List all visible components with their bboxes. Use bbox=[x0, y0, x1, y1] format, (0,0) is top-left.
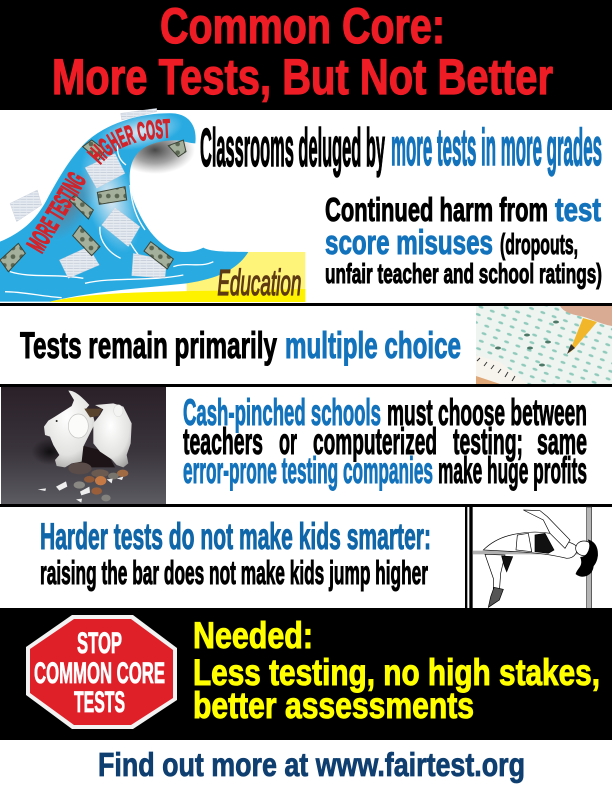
needed text: Needed: bbox=[193, 615, 313, 656]
pig eye bbox=[56, 420, 58, 422]
divider bbox=[0, 384, 612, 387]
panel: call to action band bbox=[0, 608, 612, 740]
shorts edge bbox=[516, 533, 532, 552]
wave highlight mid bbox=[69, 137, 151, 260]
pig ear bbox=[114, 405, 123, 417]
text block: cash-pinched schools: computerized bbox=[313, 421, 437, 462]
pig left half bbox=[44, 391, 95, 467]
text block: cash-pinched schools: Cash-pinched schools bbox=[183, 392, 381, 433]
text block: harder tests bbox=[40, 516, 431, 591]
text block: cash-pinched schools bbox=[183, 392, 587, 491]
pig right half bbox=[93, 403, 132, 467]
wave shape bbox=[0, 113, 248, 302]
panel: title banner bbox=[0, 0, 612, 110]
icon: stop sign: TESTS bbox=[74, 686, 125, 719]
text block: test score misuses bbox=[325, 191, 602, 289]
top bbox=[535, 533, 554, 553]
dark crack interior bbox=[72, 445, 115, 467]
shoe bbox=[488, 587, 503, 607]
torso bbox=[483, 532, 577, 558]
image: answer sheet with pencil bbox=[476, 306, 612, 384]
icon: stop sign bbox=[26, 615, 177, 729]
hair bbox=[576, 540, 598, 576]
pig snout bbox=[68, 414, 88, 438]
image: broken piggy bank bbox=[1, 387, 166, 504]
icon: stop sign: STOP bbox=[77, 627, 122, 660]
text block: cash-pinched schools: or bbox=[279, 421, 297, 462]
panel: wave illustration: MORE TESTING bbox=[21, 167, 92, 257]
dark leg shadow bbox=[502, 556, 513, 572]
needed text bbox=[193, 615, 600, 726]
wave label: higher cost: HIGHER COST bbox=[86, 118, 170, 165]
divider bbox=[0, 303, 612, 306]
crossbar bbox=[473, 551, 587, 554]
coin hole bbox=[84, 409, 102, 417]
text block: cash-pinched schools: testing; bbox=[453, 421, 523, 462]
pig cast shadow bbox=[32, 438, 68, 465]
footer link text: Find out more at www.fairtest.org bbox=[98, 746, 525, 783]
needed text: better assessments bbox=[193, 685, 474, 726]
test papers bbox=[10, 108, 167, 278]
text block: test score misuses: test bbox=[555, 191, 601, 228]
image: high jumper bbox=[465, 507, 598, 608]
wave grey shading bbox=[33, 160, 107, 250]
wave curl shadow bbox=[115, 126, 195, 174]
text block: multiple choice: multiple choice bbox=[285, 325, 461, 366]
coins bbox=[68, 462, 128, 501]
text block: test score misuses: score misuses bbox=[325, 224, 493, 262]
panel: wave illustration bbox=[0, 108, 306, 303]
sand bbox=[50, 252, 305, 302]
athlete bbox=[483, 510, 598, 607]
wave label: education: Education bbox=[217, 262, 301, 303]
leg back bbox=[485, 554, 505, 592]
wave highlight near crest bbox=[94, 106, 186, 157]
text block: cash-pinched schools: teachers bbox=[183, 421, 263, 462]
divider bbox=[0, 504, 612, 507]
dollar bills bbox=[0, 140, 186, 272]
foam lines bbox=[5, 142, 213, 298]
icon: stop sign: COMMON CORE bbox=[34, 657, 165, 690]
ceramic shards bbox=[38, 477, 123, 503]
text block: multiple choice: Tests remain primarily bbox=[20, 325, 277, 366]
head bbox=[576, 541, 592, 556]
arm bbox=[523, 510, 570, 548]
